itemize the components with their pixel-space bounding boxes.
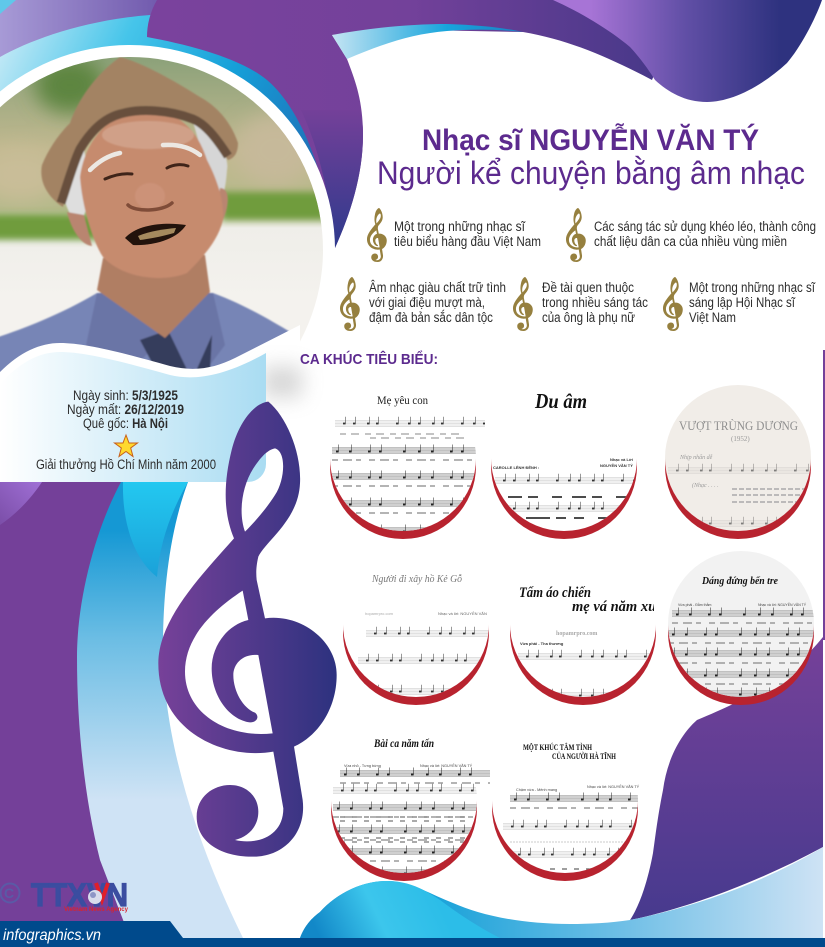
background: purple shape bottom right bbox=[630, 637, 823, 920]
title line 1: Nhạc sĩ NGUYỄN VĂN TÝ bbox=[422, 123, 759, 157]
fact 1: tiêu biểu hàng đầu Việt Nam bbox=[394, 234, 541, 249]
shirt bbox=[0, 292, 290, 372]
soft shadow beside info box bbox=[262, 366, 302, 398]
song: Du âm: NGUYỄN VĂN TÝ bbox=[600, 463, 633, 468]
song: Vượt trùng dương bbox=[665, 385, 818, 539]
song: Mẹ yêu con bbox=[330, 385, 485, 540]
fact 5 bbox=[663, 277, 816, 331]
portrait photo bbox=[0, 45, 335, 372]
background: small violet corner bbox=[0, 482, 42, 525]
footer site name: infographics.vn bbox=[3, 927, 101, 944]
background: blue wave bottom bbox=[300, 847, 823, 938]
fact 4 bbox=[513, 277, 648, 331]
title line 2: Người kể chuyện bằng âm nhạc bbox=[377, 155, 805, 191]
hair bbox=[64, 150, 86, 216]
song: Tấm áo chiến mẹ vá năm xưa: Vừa phải - Tha thương bbox=[520, 641, 564, 646]
death date: Ngày mất: 26/12/2019 bbox=[67, 402, 184, 417]
song: Tấm áo chiến mẹ vá năm xưa: mẹ vá năm xưa bbox=[572, 599, 664, 615]
song: Du âm bbox=[491, 394, 637, 539]
song: Du âm: Du âm bbox=[534, 389, 587, 413]
background: top-left lavender corner bbox=[0, 0, 170, 70]
home town: Quê gốc: Hà Nội bbox=[83, 416, 168, 431]
section heading: CA KHÚC TIÊU BIỂU: bbox=[300, 350, 438, 368]
logo: TTXVN: Vietnam News Agency bbox=[64, 906, 128, 913]
fact 3: đậm đà bản sắc dân tộc bbox=[369, 310, 493, 325]
fact 4: của ông là phụ nữ bbox=[542, 310, 635, 325]
fact 5: Việt Nam bbox=[689, 310, 736, 325]
song: Vượt trùng dương: (1952) bbox=[731, 435, 750, 443]
song: Người đi xây hồ Kẻ Gỗ: hopamrpro.com bbox=[365, 611, 394, 616]
eyes bbox=[105, 165, 188, 179]
background: blue band around portrait bbox=[0, 15, 332, 252]
fact 2: chất liệu dân ca của nhiều vùng miền bbox=[594, 234, 787, 249]
song: Tấm áo chiến mẹ vá năm xưa: Tấm áo chiến bbox=[519, 585, 591, 601]
ears bbox=[67, 212, 92, 246]
birth date: Ngày sinh: 5/3/1925 bbox=[73, 388, 178, 403]
song: Bài ca năm tấn: Bài ca năm tấn bbox=[373, 736, 434, 750]
song: Bài ca năm tấn bbox=[331, 727, 490, 882]
song: Một khúc tâm tình của người Hà Tĩnh bbox=[492, 742, 639, 881]
mouth bbox=[125, 224, 186, 245]
background: lower left purple panel bbox=[0, 482, 125, 925]
song: Bài ca năm tấn: Vừa nhỏ - Tưng bừng bbox=[344, 764, 381, 768]
song: Du âm: Nhạc và Lời bbox=[610, 457, 633, 462]
fact 5: sáng lập Hội Nhạc sĩ bbox=[689, 295, 796, 310]
eyebrows bbox=[90, 145, 200, 170]
song: Một khúc tâm tình của người Hà Tĩnh: Nhạc và lời: NGUYỄN VĂN TÝ bbox=[587, 784, 640, 789]
background: purple top swoosh bbox=[147, 0, 660, 248]
background: thin purple right edge bbox=[823, 350, 825, 640]
fact 2 bbox=[566, 208, 816, 262]
background: purple swoosh dark tip bbox=[301, 110, 363, 248]
song: Du âm: CAROLLE LÊNH ĐÊNH : bbox=[493, 465, 539, 470]
logo: TTXVN: C bbox=[4, 885, 14, 901]
song: Một khúc tâm tình của người Hà Tĩnh: Chậm vừa - Mênh mang bbox=[516, 788, 557, 792]
footer bar bbox=[0, 921, 825, 947]
face bbox=[80, 110, 223, 278]
song: Người đi xây hồ Kẻ Gỗ bbox=[343, 574, 489, 705]
song: Dáng đứng bến tre: Dáng đứng bến tre bbox=[701, 575, 778, 587]
song: Người đi xây hồ Kẻ Gỗ: Nhạc và lời: NGUYỄN VĂN TÝ bbox=[438, 611, 493, 616]
fact 4: trong nhiều sáng tác bbox=[542, 295, 648, 310]
info box bbox=[0, 352, 266, 482]
song: Tấm áo chiến mẹ vá năm xưa bbox=[510, 586, 656, 705]
background: cyan bump bbox=[300, 881, 500, 938]
song: Tấm áo chiến mẹ vá năm xưa: hopamrpro.com bbox=[556, 631, 597, 637]
song: Người đi xây hồ Kẻ Gỗ: Người đi xây hồ Kẻ Gỗ bbox=[371, 574, 462, 585]
fact 1: Một trong những nhạc sĩ bbox=[394, 219, 526, 234]
white wave under portrait bbox=[0, 325, 300, 386]
fact 4: Đề tài quen thuộc bbox=[542, 280, 634, 295]
hat bbox=[41, 57, 238, 207]
song: Một khúc tâm tình của người Hà Tĩnh: MỘT KHÚC TÂM TÌNH bbox=[523, 742, 592, 752]
song: Dáng đứng bến tre: Nhạc và lời: NGUYỄN VĂN TÝ bbox=[758, 602, 807, 607]
fact 3: Âm nhạc giàu chất trữ tình bbox=[369, 280, 506, 295]
large treble clef bbox=[158, 402, 337, 857]
title bbox=[377, 123, 805, 191]
background: cyan lens bbox=[123, 482, 188, 577]
background: blue crescent bbox=[332, 24, 523, 59]
award: Giải thưởng Hồ Chí Minh năm 2000 bbox=[36, 457, 216, 472]
song: Dáng đứng bến tre bbox=[668, 551, 822, 705]
song: Dáng đứng bến tre: Vừa phải - Đằm thắm bbox=[678, 602, 712, 607]
song: Mẹ yêu con: Mẹ yêu con bbox=[377, 393, 428, 407]
song: Vượt trùng dương: (Nhạc . . . . bbox=[692, 482, 719, 489]
nose bbox=[128, 203, 172, 210]
neck bbox=[97, 255, 210, 338]
fact 1 bbox=[367, 208, 541, 262]
song: Vượt trùng dương: VƯỢT TRÙNG DƯƠNG bbox=[679, 418, 798, 433]
song: Bài ca năm tấn: Nhạc và lời: NGUYỄN VĂN TÝ bbox=[420, 763, 473, 768]
song: Vượt trùng dương: Nhịp nhẩn dễ bbox=[679, 454, 713, 461]
song: Một khúc tâm tình của người Hà Tĩnh: CỦA NGƯỜI HÀ TĨNH bbox=[552, 751, 616, 761]
logo: TTXVN: TTXVN bbox=[31, 877, 128, 913]
background: lower left blue band bbox=[50, 482, 243, 938]
icon: star bbox=[114, 435, 138, 456]
fact 3 bbox=[340, 277, 506, 331]
fact 3: với giai điệu mượt mà, bbox=[369, 295, 485, 310]
background: violet blob top right bbox=[553, 0, 822, 102]
